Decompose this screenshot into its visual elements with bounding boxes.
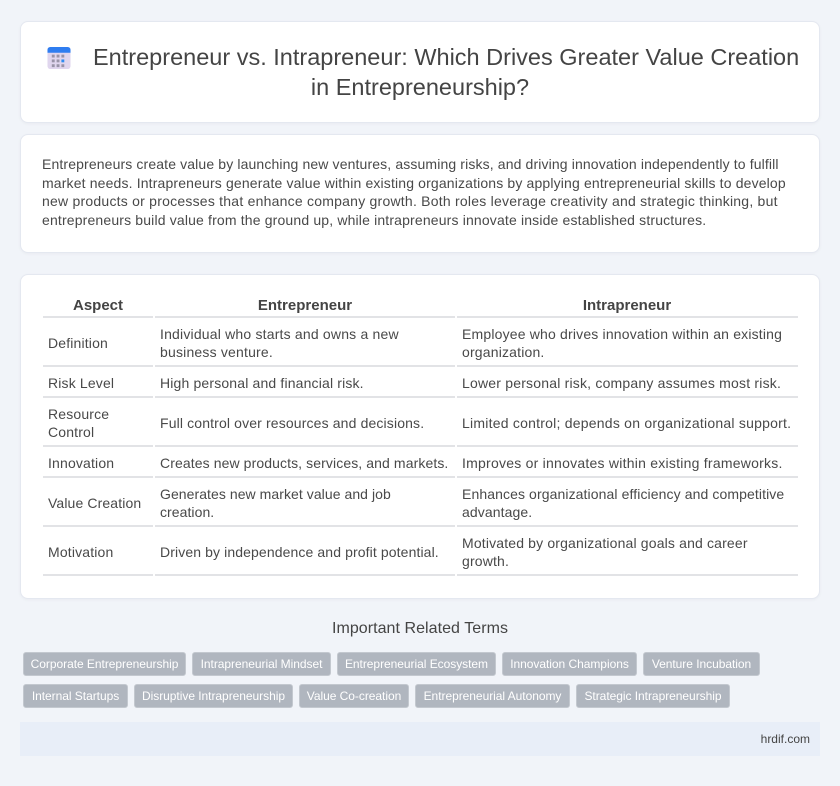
row: Motivation: Motivation	[48, 544, 113, 560]
cell: Intrapreneur value: advantage.	[462, 504, 532, 520]
tag	[643, 652, 760, 676]
cell: Intrapreneur risk: Lower personal risk, company assumes most risk.	[462, 375, 781, 391]
text block: intro paragraph: new products or processes that enhance company growth. Both roles leverage creativity and strategic thinking, but	[42, 193, 778, 209]
row: Value Creation: Value Creation	[48, 495, 141, 511]
cell: Entrepreneur definition	[160, 326, 399, 360]
tag: Value Co-creation	[307, 689, 401, 703]
tag: Venture Incubation	[652, 657, 751, 671]
cell: Entrepreneur value: Generates new market value and job	[160, 486, 391, 502]
cell: Entrepreneur value: creation.	[160, 504, 214, 520]
row: Innovation: Innovation	[48, 455, 114, 471]
tag list: related terms	[23, 652, 760, 708]
text block: intro paragraph: market needs. Intrapreneurs generate value within existing organizations by applying entrepreneurial skills to develop	[42, 175, 786, 191]
cell: Intrapreneur definition: organization.	[462, 344, 545, 360]
tag	[192, 652, 331, 676]
row: Definition: Definition	[48, 335, 108, 351]
tag	[23, 652, 186, 676]
panel: comparison table	[20, 274, 820, 599]
cell: Intrapreneur value: Enhances organizational efficiency and competitive	[462, 486, 784, 502]
tag: Intrapreneurial Mindset	[201, 657, 322, 671]
tag: Entrepreneurial Autonomy	[424, 689, 561, 703]
text block: intro paragraph	[42, 156, 786, 228]
tag: Corporate Entrepreneurship	[31, 657, 178, 671]
cell: Entrepreneur motivation: Driven by independence and profit potential.	[160, 544, 439, 560]
heading: important related terms: Important Related Terms	[332, 620, 508, 637]
row: Resource Control: Resource	[48, 406, 109, 422]
tag: Strategic Intrapreneurship	[584, 689, 722, 703]
cell: Entrepreneur value	[160, 486, 391, 520]
text block: intro paragraph: Entrepreneurs create value by launching new ventures, assuming risks, and driving innovation independently to fulfill	[42, 156, 779, 172]
row: Risk Level: Risk Level	[48, 375, 114, 391]
footer bar	[20, 722, 820, 756]
tag: Entrepreneurial Ecosystem	[345, 657, 488, 671]
panel: introduction text	[20, 134, 820, 253]
footer: site name: hrdif.com	[761, 732, 810, 746]
cell: Intrapreneur value	[462, 486, 784, 520]
cell: Entrepreneur definition: Individual who starts and owns a new	[160, 326, 399, 342]
tag	[134, 684, 293, 708]
tag	[576, 684, 730, 708]
tag	[337, 652, 496, 676]
cell: Intrapreneur innovation: Improves or innovates within existing frameworks.	[462, 455, 783, 471]
tag	[23, 684, 128, 708]
title: in Entrepreneurship?	[311, 74, 529, 100]
table header: Entrepreneur: Entrepreneur	[258, 297, 352, 314]
cell: Intrapreneur motivation	[462, 535, 748, 569]
row: Resource Control: Control	[48, 424, 94, 440]
tag: Innovation Champions	[510, 657, 629, 671]
cell: Entrepreneur definition: business venture.	[160, 344, 273, 360]
cell: Intrapreneur resources: Limited control; depends on organizational support.	[462, 415, 791, 431]
row: Resource Control	[48, 406, 109, 440]
tag: Disruptive Intrapreneurship	[142, 689, 285, 703]
text block: intro paragraph: entrepreneurs build value from the ground up, while intrapreneurs innovate inside established structures.	[42, 212, 706, 228]
cell: Entrepreneur risk: High personal and financial risk.	[160, 375, 364, 391]
cell: Intrapreneur definition: Employee who drives innovation within an existing	[462, 326, 782, 342]
cell: Entrepreneur innovation: Creates new products, services, and markets.	[160, 455, 448, 471]
tag	[415, 684, 570, 708]
table header: Intrapreneur: Intrapreneur	[583, 297, 671, 314]
table header: Aspect: Aspect	[73, 297, 123, 314]
icon: calendar	[47, 47, 71, 69]
tag	[299, 684, 409, 708]
cell: Intrapreneur motivation: Motivated by organizational goals and career	[462, 535, 748, 551]
cell: Intrapreneur motivation: growth.	[462, 553, 509, 569]
title: Entrepreneur vs. Intrapreneur: Which Drives Greater Value Creation	[93, 44, 799, 70]
panel: title header	[20, 21, 820, 123]
cell: Intrapreneur definition	[462, 326, 782, 360]
tag: Internal Startups	[32, 689, 119, 703]
tag	[502, 652, 637, 676]
cell: Entrepreneur resources: Full control over resources and decisions.	[160, 415, 424, 431]
title	[93, 44, 799, 100]
